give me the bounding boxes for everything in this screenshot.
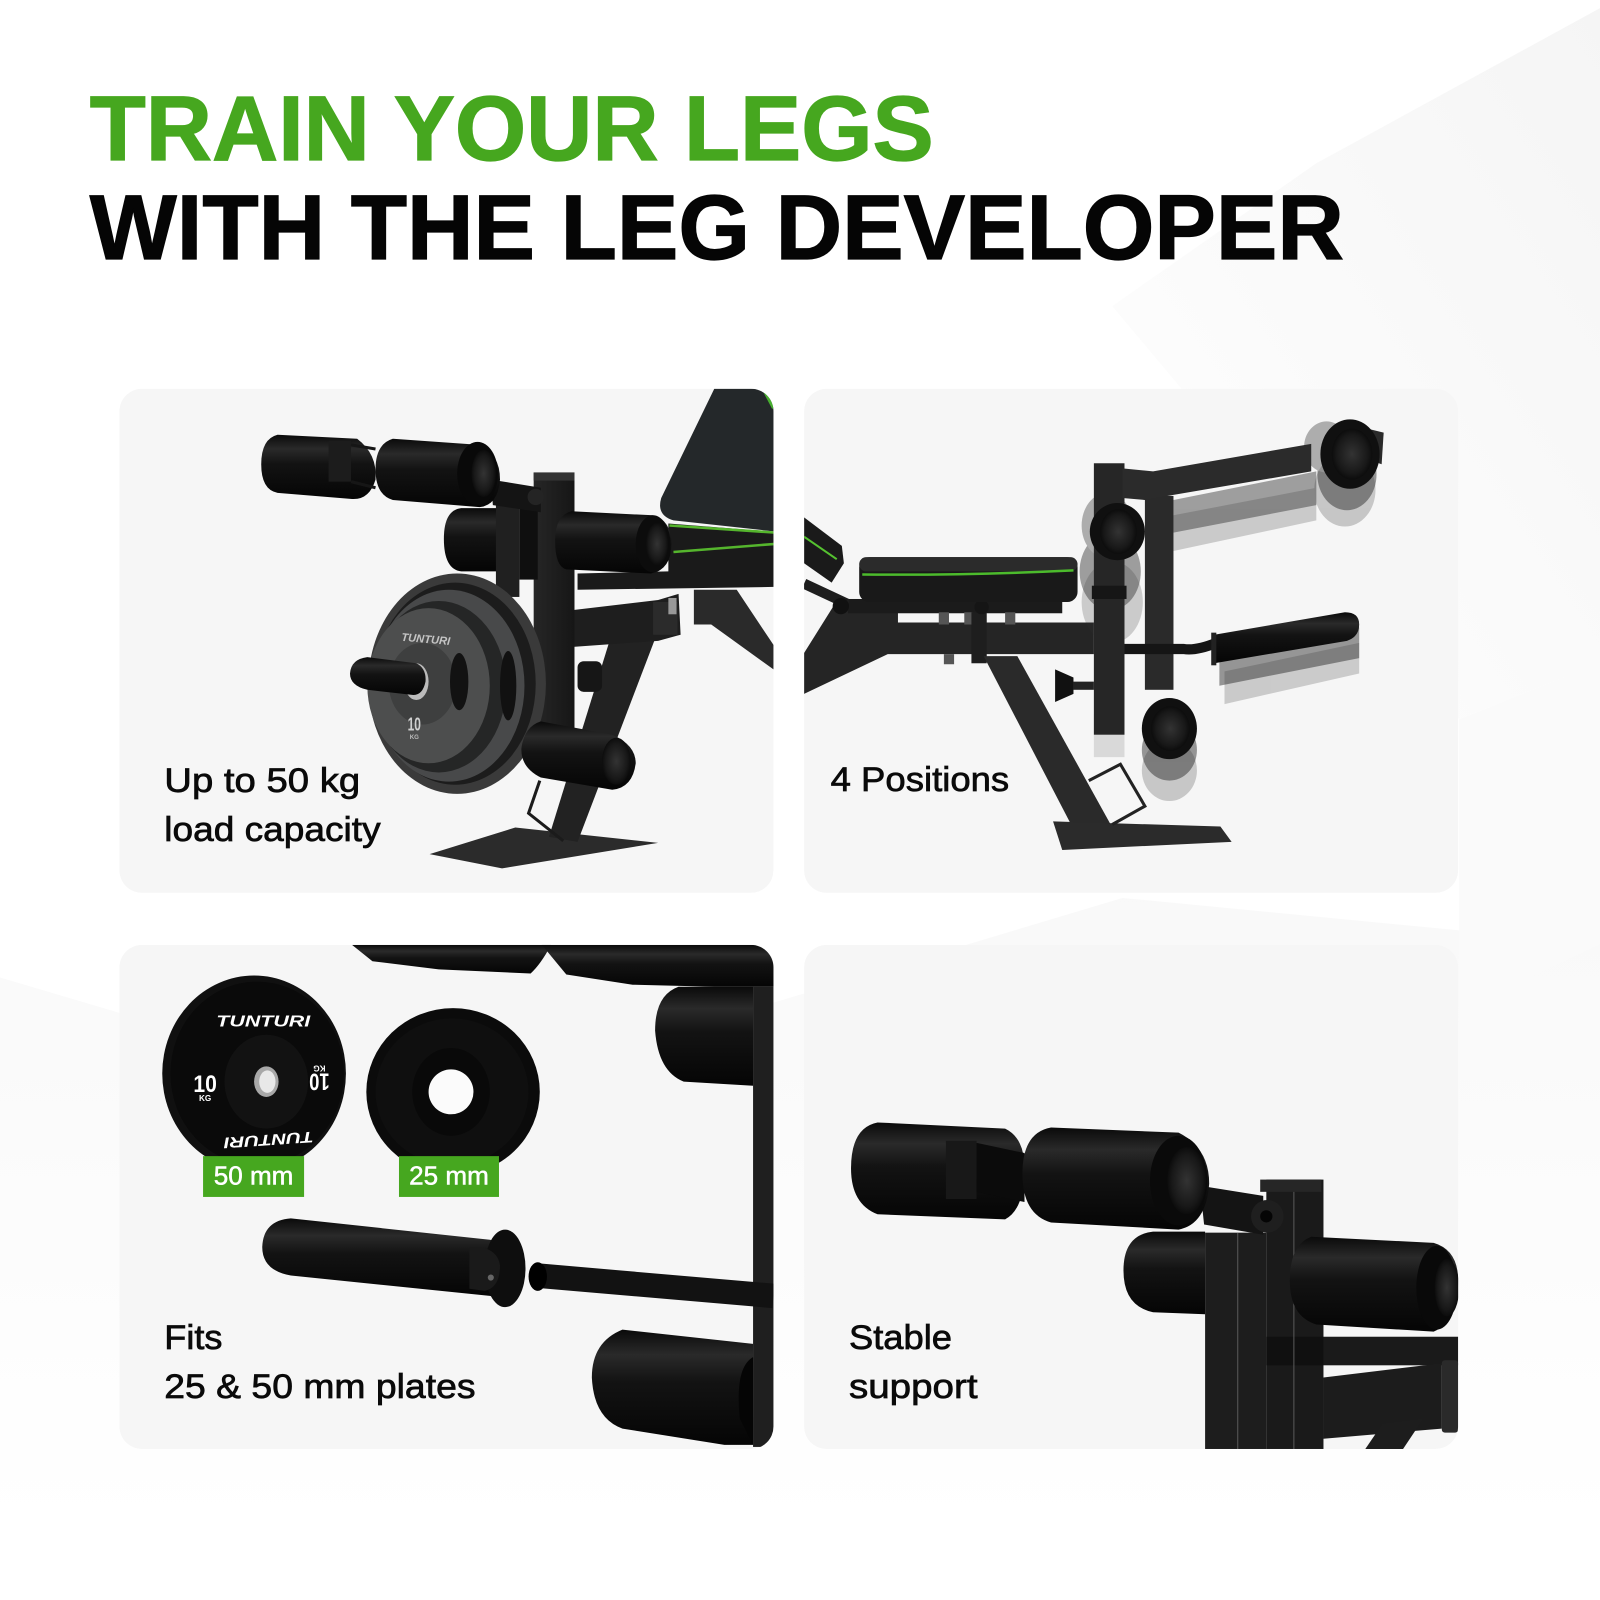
caption: load capacity: [164, 811, 381, 849]
tag: 25 mm: 25 mm: [409, 1163, 489, 1191]
post A: [1094, 463, 1124, 735]
left roller: [851, 1122, 1024, 1219]
right post: [1238, 1180, 1323, 1449]
ghost positions: [1080, 421, 1377, 801]
barbell sleeve: [1124, 612, 1359, 665]
top rollers: [352, 945, 786, 987]
caption: 25 & 50 mm plates: [164, 1368, 476, 1406]
rear leg: [694, 590, 773, 669]
caption: [164, 762, 381, 849]
backrest and seat: [578, 389, 786, 590]
horizontal tube: [571, 594, 681, 647]
weight plates: 10: [408, 714, 421, 735]
title: TRAIN YOUR LEGS: [90, 78, 934, 180]
sleeve: [262, 1218, 526, 1307]
caption: Up to 50 kg: [164, 762, 360, 800]
middle roller: [1022, 1128, 1209, 1230]
panel: four positions: [804, 389, 1458, 893]
caption: [164, 1319, 476, 1406]
tag: 25 mm: [399, 1156, 499, 1197]
bar: [529, 1262, 773, 1296]
lower roller: [592, 1330, 753, 1445]
panel: stable support: [804, 945, 1459, 1449]
title: WITH THE LEG DEVELOPER: [90, 177, 1344, 279]
50 mm plate: KG: [313, 1063, 326, 1072]
caption: support: [849, 1368, 978, 1406]
foot plate: [430, 828, 658, 868]
top left roller: [261, 435, 376, 499]
caption: [849, 1319, 978, 1406]
50 mm plate: 10: [193, 1071, 217, 1098]
weight plates: KG: [410, 734, 419, 741]
post B: [1145, 496, 1173, 690]
top arm: [1122, 444, 1311, 500]
right roller: [555, 511, 671, 573]
knob: [578, 661, 602, 692]
50 mm plate: TUNTURI: [216, 1014, 311, 1031]
lower roller: [521, 721, 636, 790]
handle: [1089, 764, 1145, 824]
front leg: [549, 639, 655, 842]
caption: 4 Positions: [831, 761, 1009, 799]
back pad: [804, 517, 844, 583]
pin: [350, 657, 429, 700]
roller arm: [492, 481, 541, 512]
left roller: [1090, 503, 1145, 560]
upper roller: [655, 987, 753, 1086]
seat pad: [859, 557, 1078, 602]
panel: plate fit: [119, 945, 786, 1449]
25 mm plate: [366, 1008, 540, 1176]
front leg: [984, 656, 1110, 824]
knob: [1055, 669, 1094, 702]
weight plates: [367, 573, 546, 794]
weight plates: TUNTURI: [401, 632, 452, 648]
clamp: [1092, 586, 1127, 599]
upright post: [753, 987, 773, 1447]
rear roller: [444, 508, 497, 571]
arm: [1200, 1186, 1284, 1235]
50 mm plate: TUNTURI: [222, 1128, 314, 1151]
caption: Stable: [849, 1319, 952, 1357]
bench frame: [804, 584, 1094, 694]
tag: 50 mm: 50 mm: [214, 1163, 293, 1191]
caption: Fits: [164, 1319, 222, 1357]
posts: [496, 472, 574, 733]
50 mm plate: [162, 976, 346, 1171]
tag: 50 mm: [203, 1156, 304, 1197]
lower roller: [1142, 698, 1197, 759]
left post: [1205, 1233, 1266, 1449]
right roller: [1290, 1237, 1459, 1332]
top right roller: [376, 439, 500, 507]
50 mm plate: 10: [309, 1067, 330, 1094]
handle: [529, 781, 563, 841]
panel: load capacity: [119, 389, 786, 893]
foot plate: [1053, 821, 1232, 850]
title: [90, 78, 1344, 279]
top roller: [1320, 419, 1384, 489]
rear roller: [1123, 1232, 1205, 1314]
50 mm plate: KG: [199, 1094, 211, 1103]
lower frame: [1323, 1337, 1458, 1449]
